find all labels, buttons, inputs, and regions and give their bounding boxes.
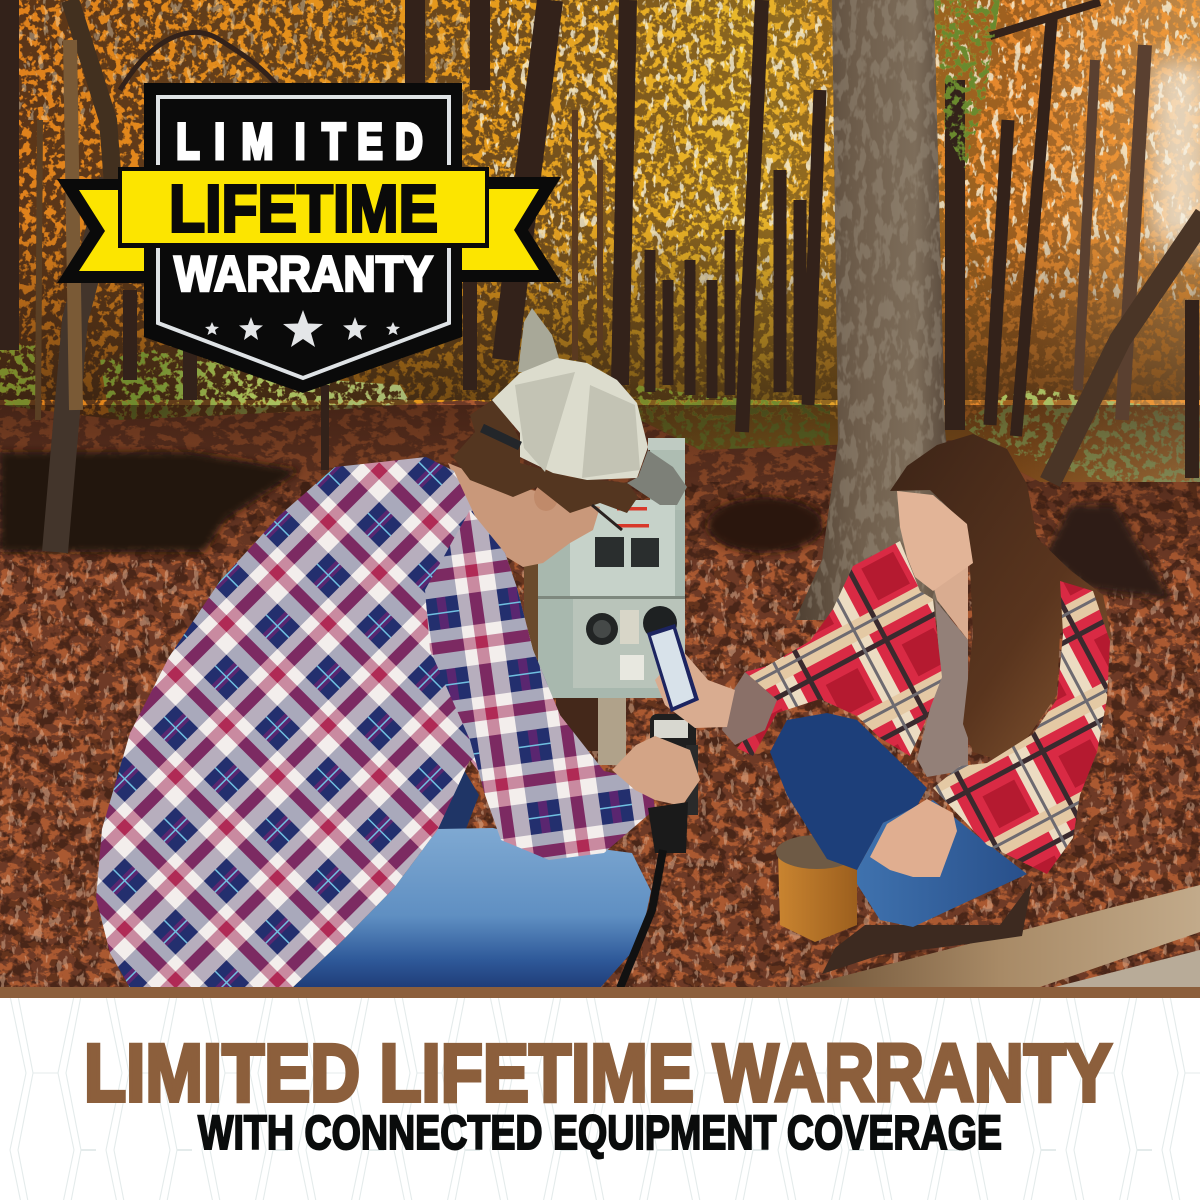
clay well cap — [776, 835, 858, 942]
footer panel — [0, 987, 1200, 1200]
man: dark jeans behind arm — [438, 760, 479, 829]
man: plaid shirt sleeve — [425, 510, 655, 860]
smartphone — [647, 624, 699, 712]
man: plaid shirt torso — [96, 457, 560, 988]
woman: undershirt — [917, 600, 968, 777]
woman: plaid shirt left side and sleeve — [737, 541, 942, 756]
woman: boots — [822, 882, 1032, 974]
pedestal support post — [524, 560, 626, 765]
woman crouching — [647, 434, 1112, 974]
brown divider band — [0, 987, 1200, 998]
power cable — [620, 850, 663, 988]
badge text: warranty: WARRANTY — [174, 246, 433, 302]
footer subheading: WITH CONNECTED EQUIPMENT COVERAGE — [198, 1107, 1002, 1160]
man: mesh trucker cap — [492, 358, 648, 480]
badge text: lifetime: LIFETIME — [169, 172, 438, 246]
man: ear — [534, 483, 558, 511]
woman: jeans shin — [857, 800, 1027, 927]
surge protector device — [650, 714, 698, 815]
man: neck and face — [448, 463, 600, 567]
forest floor of fallen leaves — [0, 400, 1200, 990]
woman: jeans thigh — [770, 713, 927, 870]
man: glasses — [592, 505, 622, 530]
man: cap strap — [482, 428, 520, 446]
badge text: limited: LIMITED — [176, 115, 423, 170]
rating stars — [205, 310, 400, 347]
footer white background with honeycomb — [0, 998, 1200, 1200]
wooden beam and gravel — [800, 885, 1200, 987]
man: cap panel shading — [515, 372, 640, 478]
large central tree — [795, 0, 1000, 620]
man: cap brim — [627, 450, 687, 505]
warranty badge — [57, 83, 561, 393]
man: jeans — [292, 828, 651, 988]
woman: hair — [890, 434, 1112, 763]
woman: hand holding phone — [655, 650, 735, 728]
stone marker behind cap — [518, 308, 560, 372]
ribbon tails — [57, 177, 561, 283]
shield — [144, 83, 462, 393]
ribbon band — [118, 167, 489, 248]
tree trunks — [8, 0, 1200, 552]
man: hand holding device — [612, 736, 700, 806]
woman: sleeve cuff — [722, 672, 777, 745]
utility power pedestal — [538, 438, 685, 698]
man: hair — [453, 400, 638, 513]
plug — [648, 802, 688, 853]
green undergrowth — [0, 345, 1200, 485]
woman: neck — [933, 565, 968, 640]
forest canopy background — [0, 0, 1200, 500]
dark earth banks — [0, 452, 1172, 600]
man crouching — [96, 358, 700, 988]
woman: face — [897, 491, 973, 591]
woman: plaid shirt right side — [933, 581, 1110, 874]
woman: hand on knee — [870, 799, 957, 877]
